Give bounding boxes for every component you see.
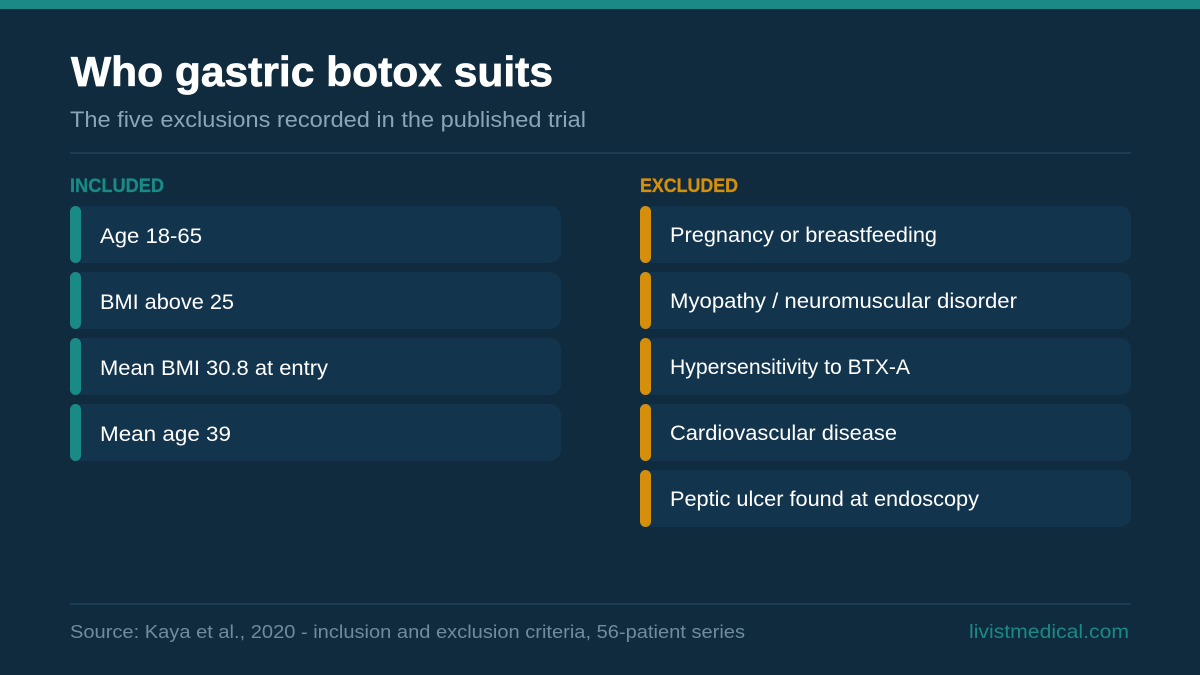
top accent bar <box>0 0 1200 9</box>
item: myopathy <box>640 272 1131 329</box>
item: myopathy: Myopathy / neuromuscular disorder <box>670 290 1017 313</box>
item: hypersensitivity <box>640 338 1131 395</box>
website: livistmedical.com <box>969 622 1129 643</box>
item: BMI threshold <box>70 272 561 329</box>
subtitle: The five exclusions recorded in the published trial <box>70 107 586 132</box>
item: peptic ulcer <box>640 470 1131 527</box>
heading: excluded: EXCLUDED <box>640 176 738 197</box>
item: BMI threshold: BMI above 25 <box>100 291 234 314</box>
source note: Source: Kaya et al., 2020 - inclusion and exclusion criteria, 56-patient series <box>70 621 745 642</box>
item: peptic ulcer: Peptic ulcer found at endoscopy <box>670 488 980 511</box>
item: mean BMI: Mean BMI 30.8 at entry <box>100 357 329 380</box>
item: cardiovascular disease: Cardiovascular disease <box>670 422 897 445</box>
item: hypersensitivity: Hypersensitivity to BTX-A <box>670 356 910 379</box>
item: mean age: Mean age 39 <box>100 423 231 446</box>
item: pregnancy <box>640 206 1131 263</box>
item: mean BMI <box>70 338 561 395</box>
item: mean age <box>70 404 561 461</box>
item: pregnancy: Pregnancy or breastfeeding <box>670 224 937 247</box>
heading: included: INCLUDED <box>70 176 164 197</box>
item: cardiovascular disease <box>640 404 1131 461</box>
item: age range: Age 18-65 <box>100 225 202 248</box>
item: age range <box>70 206 561 263</box>
title: Who gastric botox suits <box>71 48 553 95</box>
panel: excluded <box>640 176 1131 527</box>
panel: included <box>70 176 561 461</box>
